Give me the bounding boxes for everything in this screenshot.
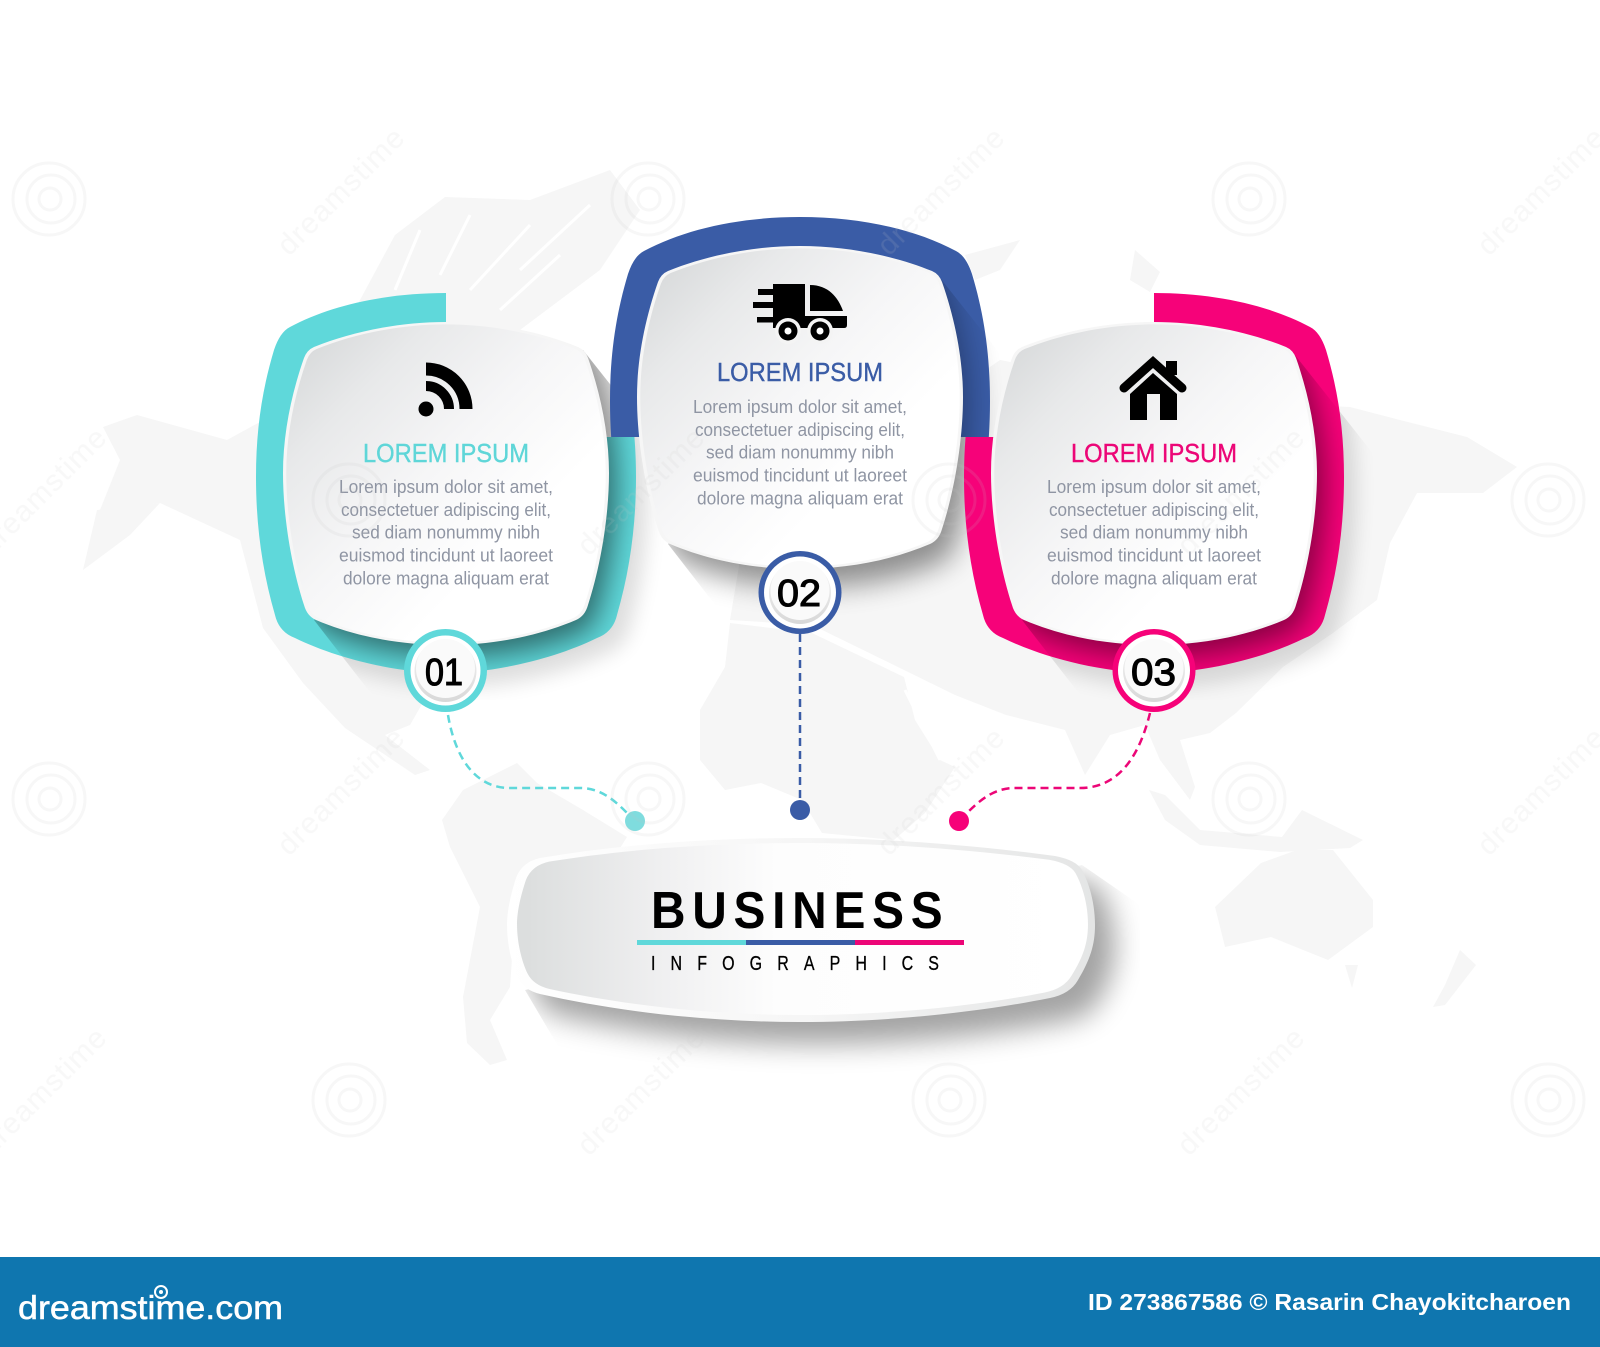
watermark overlay: dreamstime <box>571 421 712 562</box>
watermark overlay <box>0 121 1600 1162</box>
ring: blue <box>610 217 990 437</box>
card 2 body: consectetuer adipiscing elit, <box>695 420 905 440</box>
card 1 body: sed diam nonummy nibh <box>352 522 540 542</box>
card 2 body: sed diam nonummy nibh <box>706 442 894 462</box>
card 3 body <box>1047 477 1261 588</box>
panel: business infographics title <box>507 838 1115 1044</box>
card 3 surface <box>991 322 1317 645</box>
card 1 surface <box>283 322 609 645</box>
icon: rss <box>418 369 466 416</box>
ring: teal <box>256 293 636 673</box>
world map <box>83 170 1517 1065</box>
step badge 03 <box>1112 629 1196 712</box>
watermark overlay: dreamstime <box>1171 421 1312 562</box>
watermark overlay: dreamstime <box>571 1021 712 1162</box>
watermark overlay: dreamstime <box>271 121 412 262</box>
panel: card 2 <box>637 246 963 569</box>
card 3 title: LOREM IPSUM <box>1071 438 1237 468</box>
card 1 body: Lorem ipsum dolor sit amet, <box>339 477 553 497</box>
icon: delivery truck <box>753 284 847 344</box>
soft shadows behind the rings <box>268 264 1356 687</box>
step badge 02 <box>758 551 842 634</box>
card 2 body: dolore magna aliquam erat <box>697 488 903 508</box>
connector: blue dashed line with dot <box>790 634 810 820</box>
panel: card 1 <box>283 322 609 645</box>
footer credit: ID 273867586 © Rasarin Chayokitcharoen <box>1088 1289 1571 1315</box>
footer bar <box>0 1257 1600 1347</box>
card 3 body: euismod tincidunt ut laoreet <box>1047 546 1261 566</box>
connector: pink dashed line with dot <box>949 713 1150 831</box>
card 1 body: dolore magna aliquam erat <box>343 568 549 588</box>
card 1 body <box>339 477 553 588</box>
watermark overlay: dreamstime <box>871 721 1012 862</box>
card 3 body: dolore magna aliquam erat <box>1051 568 1257 588</box>
watermark overlay: dreamstime <box>271 721 412 862</box>
card 2 title: LOREM IPSUM <box>717 357 883 387</box>
card 2 body <box>693 397 907 508</box>
panel: card 3 <box>991 322 1317 645</box>
tri-colour underline <box>637 940 964 945</box>
card 3 body: consectetuer adipiscing elit, <box>1049 500 1259 520</box>
watermark overlay: dreamstime <box>1171 1021 1312 1162</box>
card 2 body: Lorem ipsum dolor sit amet, <box>693 397 907 417</box>
watermark overlay: dreamstime <box>871 121 1012 262</box>
card 1 title: LOREM IPSUM <box>363 438 529 468</box>
subheading: infographics: INFOGRAPHICS <box>651 952 939 974</box>
ring: pink <box>964 293 1344 673</box>
connector: teal dashed line with dot <box>448 715 645 831</box>
card 3 body: Lorem ipsum dolor sit amet, <box>1047 477 1261 497</box>
step badge 03: 03 <box>1131 652 1176 694</box>
step badge 01: 01 <box>425 652 463 694</box>
step badge 01 <box>404 629 487 712</box>
icon: house <box>1124 361 1182 420</box>
card 3 body: sed diam nonummy nibh <box>1060 522 1248 542</box>
step badge 02: 02 <box>777 573 821 615</box>
heading: business: BUSINESS <box>651 881 943 939</box>
card 2 body: euismod tincidunt ut laoreet <box>693 466 907 486</box>
card 2 surface <box>637 246 963 569</box>
card 1 body: consectetuer adipiscing elit, <box>341 500 551 520</box>
footer logo: dreamstime.com <box>18 1289 283 1326</box>
card 1 body: euismod tincidunt ut laoreet <box>339 546 553 566</box>
